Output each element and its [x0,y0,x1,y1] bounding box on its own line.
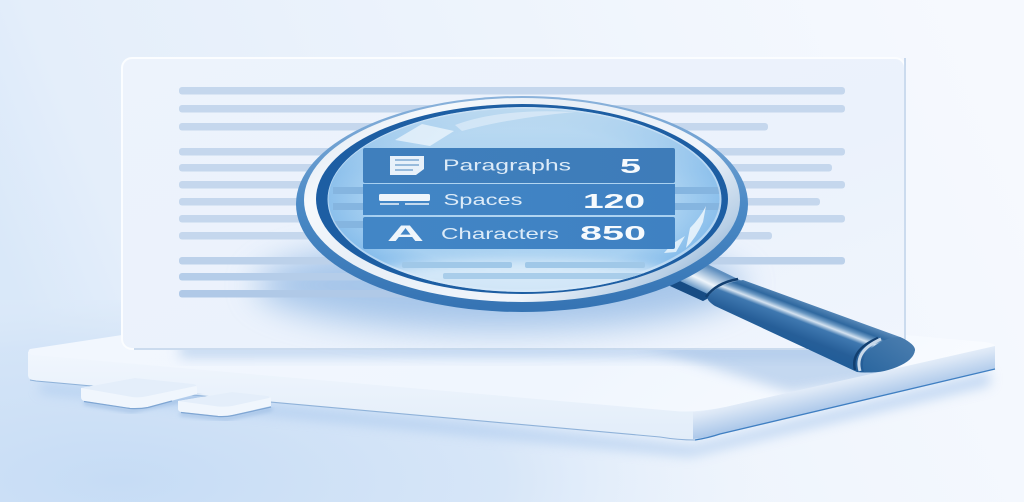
value: spaces: 120 [583,191,645,213]
lens text lines [333,187,720,228]
label: characters: Characters [441,226,559,243]
stat row: characters [363,217,675,249]
value: paragraphs: 5 [620,156,641,178]
stat row: paragraphs [363,148,675,183]
shadow under document and handle [180,342,900,392]
magnifier ring [296,96,748,312]
label: spaces: Spaces [444,192,522,209]
small tile right [178,392,272,419]
icon: space bar [379,194,430,204]
lens highlights [395,124,454,146]
magnifier lens [327,107,722,304]
document text lines [179,87,845,298]
small tile left [81,378,200,411]
magnifier shadow on document [255,239,745,331]
magnifier [296,96,915,372]
icon: letter A: A [387,221,424,246]
magnifier handle [668,264,915,372]
document panel [122,58,905,349]
base platform [28,335,995,456]
icon: paragraph note [390,156,424,175]
lens bottom glow [382,255,665,292]
value: characters: 850 [580,223,646,245]
label: paragraphs: Paragraphs [443,158,571,174]
stat row: spaces [363,184,675,215]
